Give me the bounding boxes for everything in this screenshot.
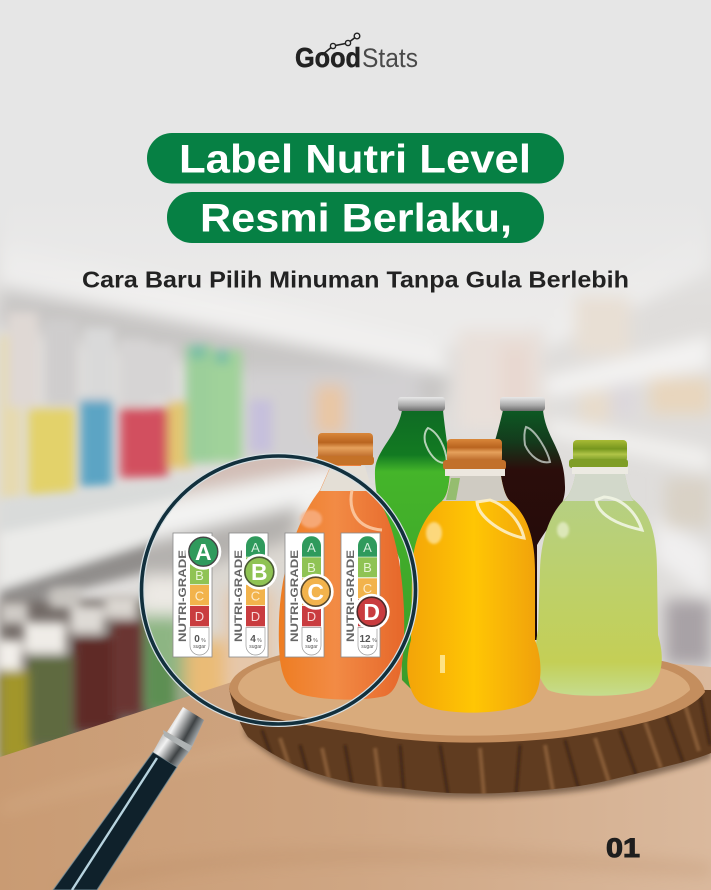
subtitle: Cara Baru Pilih Minuman Tanpa Gula Berlebih [82,266,629,292]
nutri-grade label B: sugar [249,644,262,650]
nutri-grade label D: NUTRI-GRADE [345,550,357,642]
orange bottle [279,433,404,700]
top fade overlay [0,0,711,186]
title pill: Label Nutri Level: Label Nutri Level [179,138,531,182]
nutri-grade label D: D [363,599,380,625]
nutri-grade label D: sugar [361,644,374,650]
nutri-grade label A: NUTRI-GRADE [177,550,189,642]
nutri-grade label A: A [195,539,212,565]
blurred supermarket shelf background [0,278,711,890]
nutri-grade label A: C [195,588,204,604]
nutri-grade label D: B [363,560,372,575]
nutri-grade label B: B [251,559,268,585]
nutri-grade label C: D [307,609,316,624]
nutri-grade label B: D [251,609,260,624]
nutri-grade label B: A [251,540,260,555]
title pill: Label Nutri Level [147,133,564,184]
GoodStats logo [295,33,418,73]
nutri-grade label D: C [363,581,372,596]
nutri-grade label C [285,533,334,657]
nutri-grade label C: % [313,638,318,644]
nutri-grade label A: sugar [193,644,206,650]
title pill: Resmi Berlaku: Resmi Berlaku, [200,196,512,240]
nutri-grade label C: C [307,579,324,605]
nutri-grade label B: C [251,588,260,604]
nutri-grade label A: % [201,638,206,644]
nutri-grade label D [341,533,390,657]
nutri-grade label C: 8 [306,634,312,645]
nutri-grade label B [229,533,277,657]
nutri-grade label D: % [372,638,377,644]
yellow bottle [407,439,540,713]
nutri-grade label A [173,533,221,657]
nutri-grade label B: 4 [250,634,256,645]
nutri-grade label C: NUTRI-GRADE [289,550,301,642]
GoodStats logo: Stats [362,43,418,73]
GoodStats logo: Good [295,42,361,73]
nutri-grade label C: B [307,560,316,575]
nutri-grade label B: NUTRI-GRADE [233,550,245,642]
nutri-grade label A: 0 [194,634,200,645]
title pill: Resmi Berlaku [167,192,544,243]
nutri-grade label C: sugar [305,644,318,650]
dark bottle [496,397,566,640]
nutri-grade label A: B [195,568,204,583]
page number: 01 [606,833,640,863]
green bottle [375,397,450,690]
magnifier lens ring [142,456,416,724]
lens background view [144,459,400,694]
nutri-grade label C: A [307,540,316,555]
wooden log board [229,641,711,798]
nutri-grade label B: % [257,638,262,644]
nutri-grade label D: 12 [359,634,371,645]
nutri-grade label D: A [363,540,372,555]
wooden table [0,650,711,890]
nutri-grade label A: D [195,609,204,624]
magnifier handle [53,707,204,890]
lime bottle [536,440,662,696]
